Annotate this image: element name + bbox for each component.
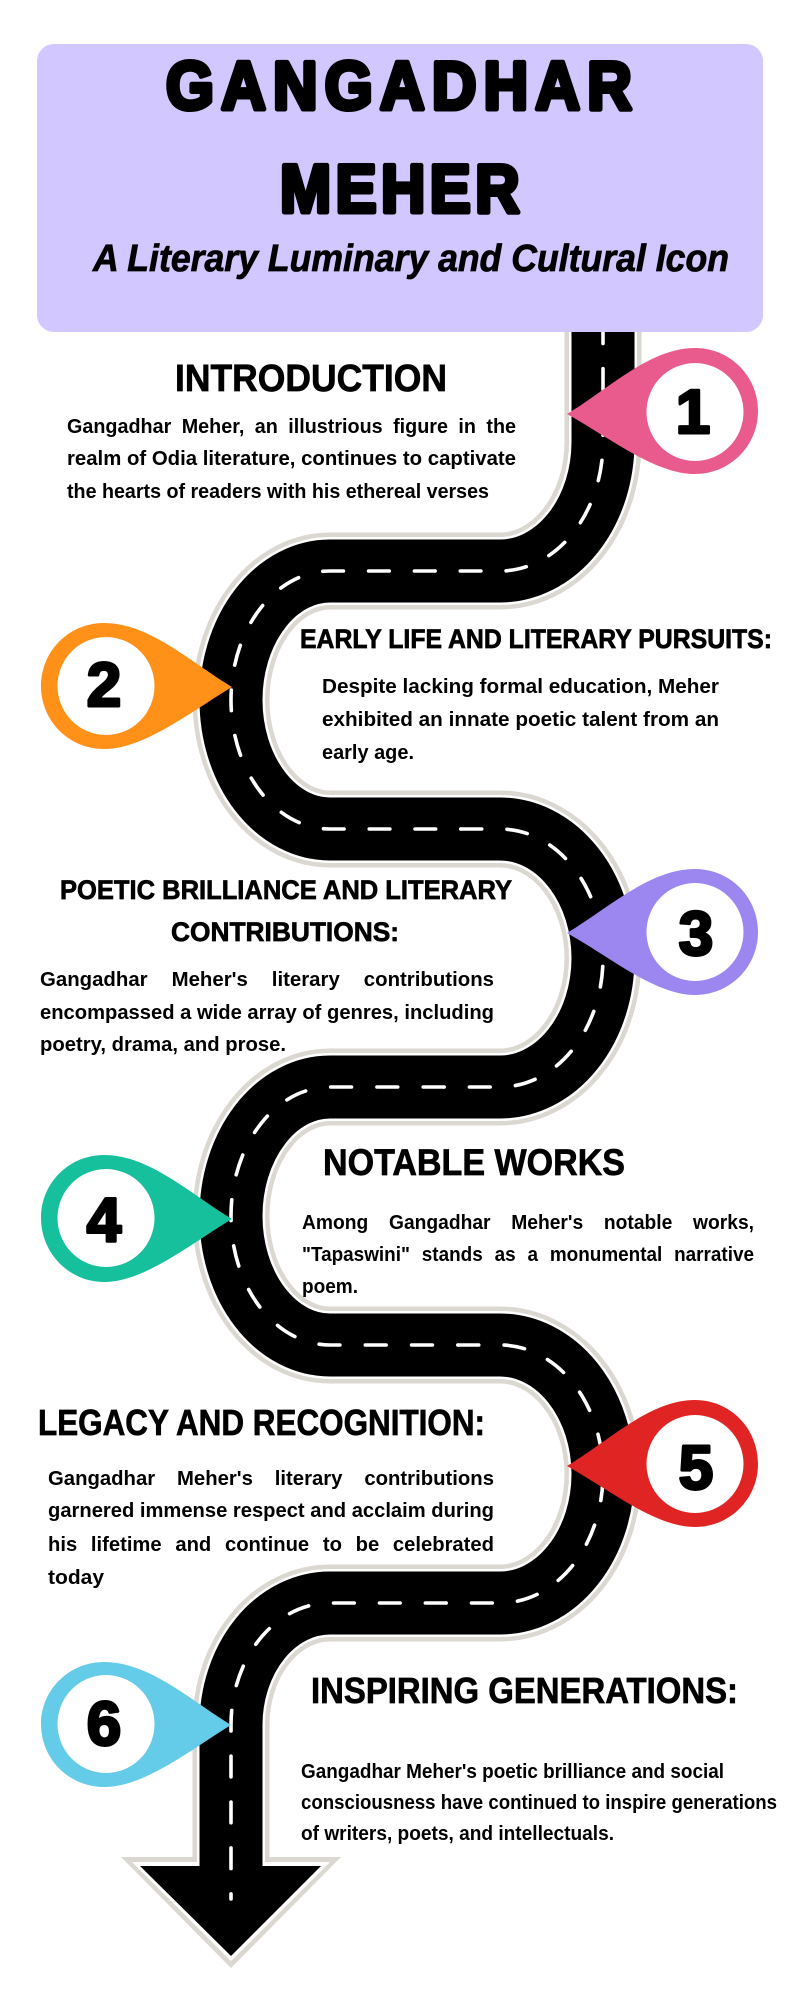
heading: poetic brilliance: CONTRIBUTIONS: [171,917,399,947]
marker 5 [567,1400,758,1527]
title: MEHER [280,151,524,227]
text: notable works: "Tapaswini" stands as a monumental narrative [302,1244,754,1266]
section: legacy [38,1402,494,1589]
marker 5: 5 [679,1434,713,1503]
marker 6: 6 [87,1690,121,1759]
text: inspiring generations [301,1761,777,1845]
text: notable works: Among Gangadhar Meher's notable works, [302,1212,754,1234]
marker 4 [41,1155,232,1282]
title [166,48,639,227]
text: poetic brilliance: Gangadhar Meher's literary contributions [40,969,494,991]
road with arrow [121,250,603,1968]
marker 1 [567,348,758,474]
heading: poetic brilliance [60,875,512,947]
title panel [37,44,763,332]
text: notable works [302,1212,754,1298]
section: notable works [302,1142,754,1298]
marker 2 [41,623,232,749]
heading: introduction: INTRODUCTION [175,358,447,400]
text: legacy: Gangadhar Meher's literary contributions [48,1468,494,1490]
subtitle: A Literary Luminary and Cultural Icon [92,238,729,280]
section: introduction [67,358,516,503]
section: early life [300,624,772,764]
text: poetic brilliance: encompassed a wide array of genres, including [40,1002,494,1024]
text: introduction: the hearts of readers with his ethereal verses [67,481,489,503]
text: inspiring generations: consciousness have continued to inspire generations [301,1792,777,1814]
title: GANGADHAR [166,48,639,124]
text: early life: Despite lacking formal education, Meher [322,676,719,698]
text: poetic brilliance [40,969,494,1056]
text: introduction: Gangadhar Meher, an illustrious figure in the [67,416,516,438]
marker 1: 1 [676,378,710,447]
text: inspiring generations: of writers, poets, and intellectuals. [301,1823,614,1845]
heading: notable works: NOTABLE WORKS [323,1142,625,1183]
section: poetic brilliance [40,875,512,1056]
text: legacy: his lifetime and continue to be celebrated [48,1534,494,1556]
marker 3: 3 [679,900,713,969]
heading: early life: EARLY LIFE AND LITERARY PURSUITS: [300,624,772,654]
text: legacy [48,1468,494,1589]
marker 2: 2 [87,651,121,720]
marker 4: 4 [87,1186,122,1255]
text: poetic brilliance: poetry, drama, and prose. [40,1034,286,1056]
heading: inspiring generations: INSPIRING GENERATIONS: [311,1670,738,1711]
text: legacy: today [48,1567,105,1589]
text: legacy: garnered immense respect and acclaim during [48,1500,494,1522]
heading: legacy: LEGACY AND RECOGNITION: [38,1402,485,1443]
section: inspiring generations [301,1670,777,1845]
heading: poetic brilliance: POETIC BRILLIANCE AND LITERARY [60,875,512,905]
marker 3 [567,869,758,995]
text: early life: exhibited an innate poetic talent from an [322,709,719,731]
text: notable works: poem. [302,1276,358,1298]
text: early life: early age. [322,742,414,764]
text: introduction [67,416,516,503]
text: early life [322,676,719,764]
text: inspiring generations: Gangadhar Meher's poetic brilliance and social [301,1761,724,1783]
marker 6 [41,1662,231,1787]
text: introduction: realm of Odia literature, continues to captivate [67,448,516,470]
